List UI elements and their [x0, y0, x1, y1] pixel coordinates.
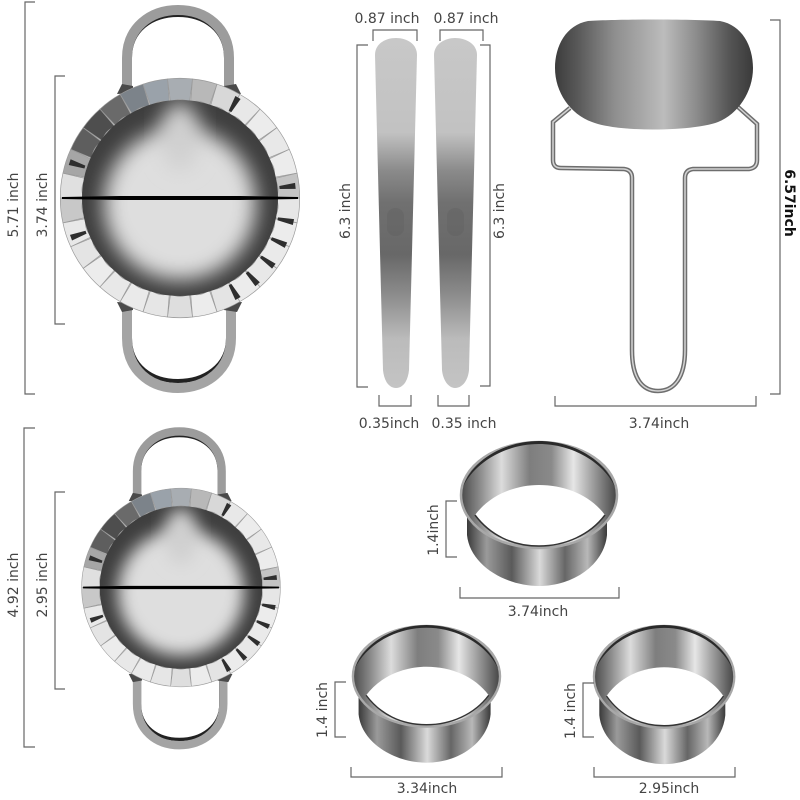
label: 1.4 inch small: 1.4 inch: [563, 683, 579, 739]
label: 0.35inch: 0.35inch: [359, 416, 419, 432]
medium ring cutter: [353, 625, 500, 763]
label: 0.35 inch: 0.35 inch: [432, 416, 496, 432]
bracket: right spatula tip width: [438, 395, 469, 406]
bracket: rolling pin width: [555, 396, 756, 406]
bracket: medium ring height: [335, 682, 346, 737]
bracket: large mold height: [25, 2, 35, 394]
bracket: small mold height: [24, 428, 35, 747]
bracket: small mold diameter: [55, 492, 65, 689]
bracket: small ring height: [583, 683, 594, 737]
label: 1.4inch: 1.4inch: [426, 504, 442, 556]
bracket: large ring height: [446, 501, 457, 557]
bracket: left spatula length: [357, 45, 368, 387]
large dumpling mold: [60, 10, 300, 388]
small ring cutter: [594, 625, 734, 764]
label: 3.74inch ring: 3.74inch: [508, 604, 568, 620]
label: 2.95 inch: 2.95 inch: [35, 553, 51, 617]
bracket: large ring width: [460, 587, 619, 598]
label: 2.95inch: 2.95inch: [639, 781, 699, 797]
bracket: left spatula top width: [373, 30, 417, 41]
label: 3.34inch: 3.34inch: [397, 781, 457, 797]
label: 6.3 inch left: 6.3 inch: [338, 183, 354, 239]
label: 1.4 inch medium: 1.4 inch: [315, 682, 331, 738]
label: 6.3 inch right: 6.3 inch: [492, 183, 508, 239]
bracket: rolling pin height: [770, 20, 780, 394]
rolling pin: [553, 20, 757, 391]
bracket: medium ring width: [351, 767, 502, 777]
label: 3.74 inch: 3.74 inch: [35, 173, 51, 237]
bracket: small ring width: [594, 767, 735, 777]
label: 3.74inch roller: 3.74inch: [629, 416, 689, 432]
large ring cutter: [461, 441, 617, 586]
left spatula: [375, 38, 417, 388]
label: 0.87 inch right: 0.87 inch: [434, 11, 498, 27]
bracket: left spatula tip width: [379, 395, 411, 406]
right spatula: [434, 38, 477, 388]
bracket: large mold diameter: [55, 76, 65, 324]
bracket: right spatula length: [480, 45, 490, 386]
label: 4.92 inch: 4.92 inch: [6, 553, 22, 617]
small dumpling mold: [81, 431, 281, 745]
label: 6.57inch: 6.57inch: [781, 169, 797, 237]
label: 5.71 inch: 5.71 inch: [6, 173, 22, 237]
bracket: right spatula top width: [440, 30, 483, 41]
label: 0.87 inch left: 0.87 inch: [355, 11, 419, 27]
